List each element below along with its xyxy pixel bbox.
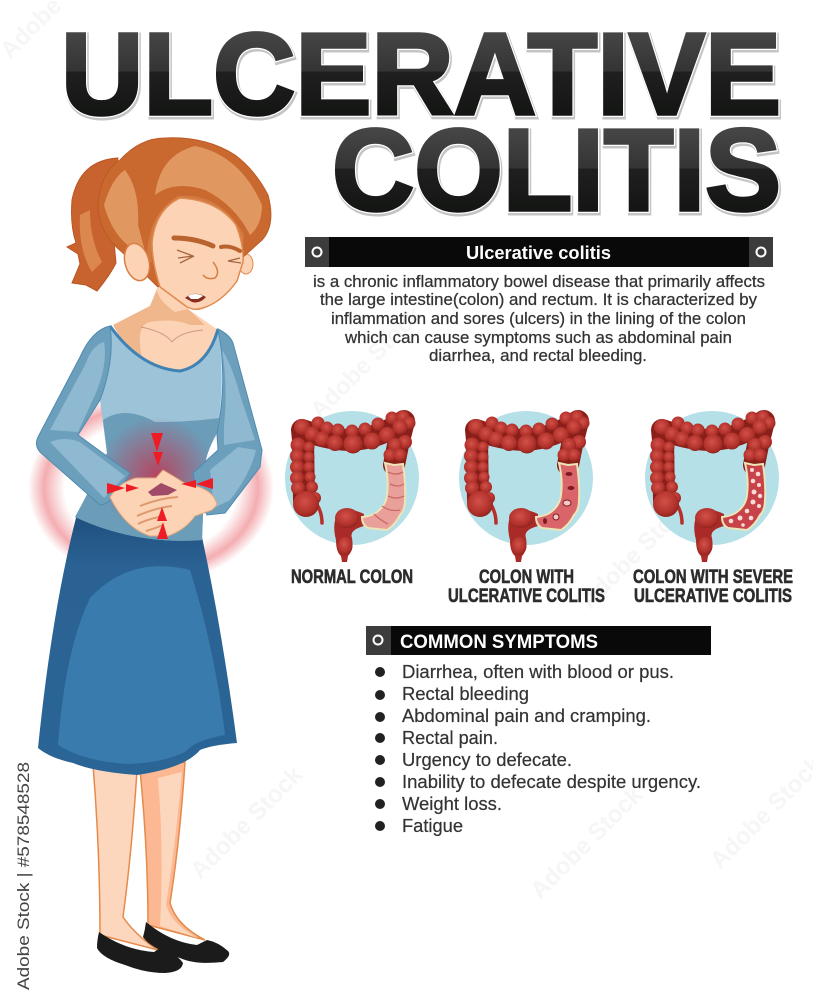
ponytail light <box>80 210 102 272</box>
banner right cap <box>749 237 773 267</box>
pain glow ring <box>28 392 274 584</box>
pain arrows <box>107 433 213 539</box>
healthy inner lining <box>362 463 405 530</box>
title line: ULCERATIVE: ULCERATIVE <box>61 9 781 139</box>
symptoms list: Weight loss. <box>402 794 502 814</box>
definition paragraph: the large intestine(colon) and rectum. It is characterized by <box>320 291 758 309</box>
title <box>61 9 782 237</box>
hands <box>110 470 217 536</box>
collarbones <box>141 327 203 342</box>
definition paragraph: inflammation and sores (ulcers) in the lining of the colon <box>331 310 746 328</box>
left sleeve <box>36 326 130 505</box>
ponytail <box>67 158 118 291</box>
left sleeve highlight <box>50 342 105 432</box>
symptoms list: Fatigue <box>402 816 463 836</box>
ulcerated lining <box>536 463 579 530</box>
mouth <box>185 294 206 302</box>
hair highlights <box>104 146 262 255</box>
symptoms list: Urgency to defecate. <box>402 750 572 770</box>
colon: severe ulcerative colitis <box>645 410 779 562</box>
symptoms list: Rectal bleeding <box>402 684 529 704</box>
hairline band <box>147 196 244 262</box>
face <box>152 198 243 309</box>
banner cap <box>366 626 391 655</box>
watermark: Adobe Stock <box>525 781 648 904</box>
hair back <box>98 138 271 287</box>
shoes <box>97 922 229 973</box>
banner heading: Ulcerative colitis <box>466 243 611 263</box>
left sleeve cuff highlight <box>50 439 125 498</box>
colon: normal <box>285 410 419 562</box>
woman illustration <box>28 138 274 973</box>
symptoms list: Rectal pain. <box>402 728 498 748</box>
title line: COLITIS: COLITIS <box>333 107 782 237</box>
skirt <box>38 514 237 775</box>
watermark: Adobe Stock <box>575 491 698 614</box>
severely ulcerated lining <box>722 463 765 530</box>
right sleeve <box>193 329 262 515</box>
symptoms list: Inability to defecate despite urgency. <box>402 772 701 792</box>
label: colon with severe ulcerative colitis <box>633 567 793 607</box>
legs <box>93 762 205 950</box>
shirt waist shade <box>75 413 219 541</box>
definition banner <box>305 237 773 267</box>
neck shadow <box>113 290 205 358</box>
right sleeve highlight <box>222 350 255 445</box>
colon: ulcerative colitis <box>459 410 593 562</box>
title line: COLITIS: COLITIS <box>332 105 781 235</box>
right ear <box>239 254 253 274</box>
eyebrows <box>174 238 240 251</box>
left ear <box>120 241 154 283</box>
banner left cap <box>305 237 329 267</box>
definition paragraph: which can cause symptoms such as abdominal pain <box>344 329 732 347</box>
colon labels <box>291 567 793 607</box>
belly pain glow <box>99 417 215 533</box>
title line: ULCERATIVE: ULCERATIVE <box>62 11 782 141</box>
definition paragraph: diarrhea, and rectal bleeding. <box>429 347 647 365</box>
label: colon with ulcerative colitis: ULCERATIVE COLITIS <box>448 586 605 607</box>
nose <box>203 262 218 279</box>
neckline <box>110 326 218 371</box>
watermark: Adobe Stock <box>185 761 308 884</box>
label: colon with ulcerative colitis: COLON WITH <box>479 567 574 588</box>
title line: COLITIS: COLITIS <box>332 105 781 235</box>
definition paragraph <box>313 273 765 365</box>
right sleeve cuff highlight <box>210 447 256 508</box>
definition paragraph: is a chronic inflammatory bowel disease that primarily affects <box>313 273 765 291</box>
stock credit: Adobe Stock | #578548528 <box>14 762 33 990</box>
closed eyes <box>177 250 241 263</box>
skirt highlight <box>58 566 225 764</box>
symptoms list: Diarrhea, often with blood or pus. <box>402 662 674 682</box>
symptoms list: Abdominal pain and cramping. <box>402 706 651 726</box>
label: normal colon: NORMAL COLON <box>291 567 413 588</box>
title line: ULCERATIVE: ULCERATIVE <box>61 9 781 139</box>
label: colon with ulcerative colitis <box>448 567 605 607</box>
neck and chest <box>113 288 218 370</box>
symptoms list <box>375 662 701 836</box>
watermark: Adobe Stock <box>305 301 428 424</box>
symptoms banner <box>366 626 711 655</box>
banner heading: COMMON SYMPTOMS <box>400 632 598 653</box>
symptom bullets <box>375 667 385 831</box>
shirt torso <box>75 326 222 541</box>
